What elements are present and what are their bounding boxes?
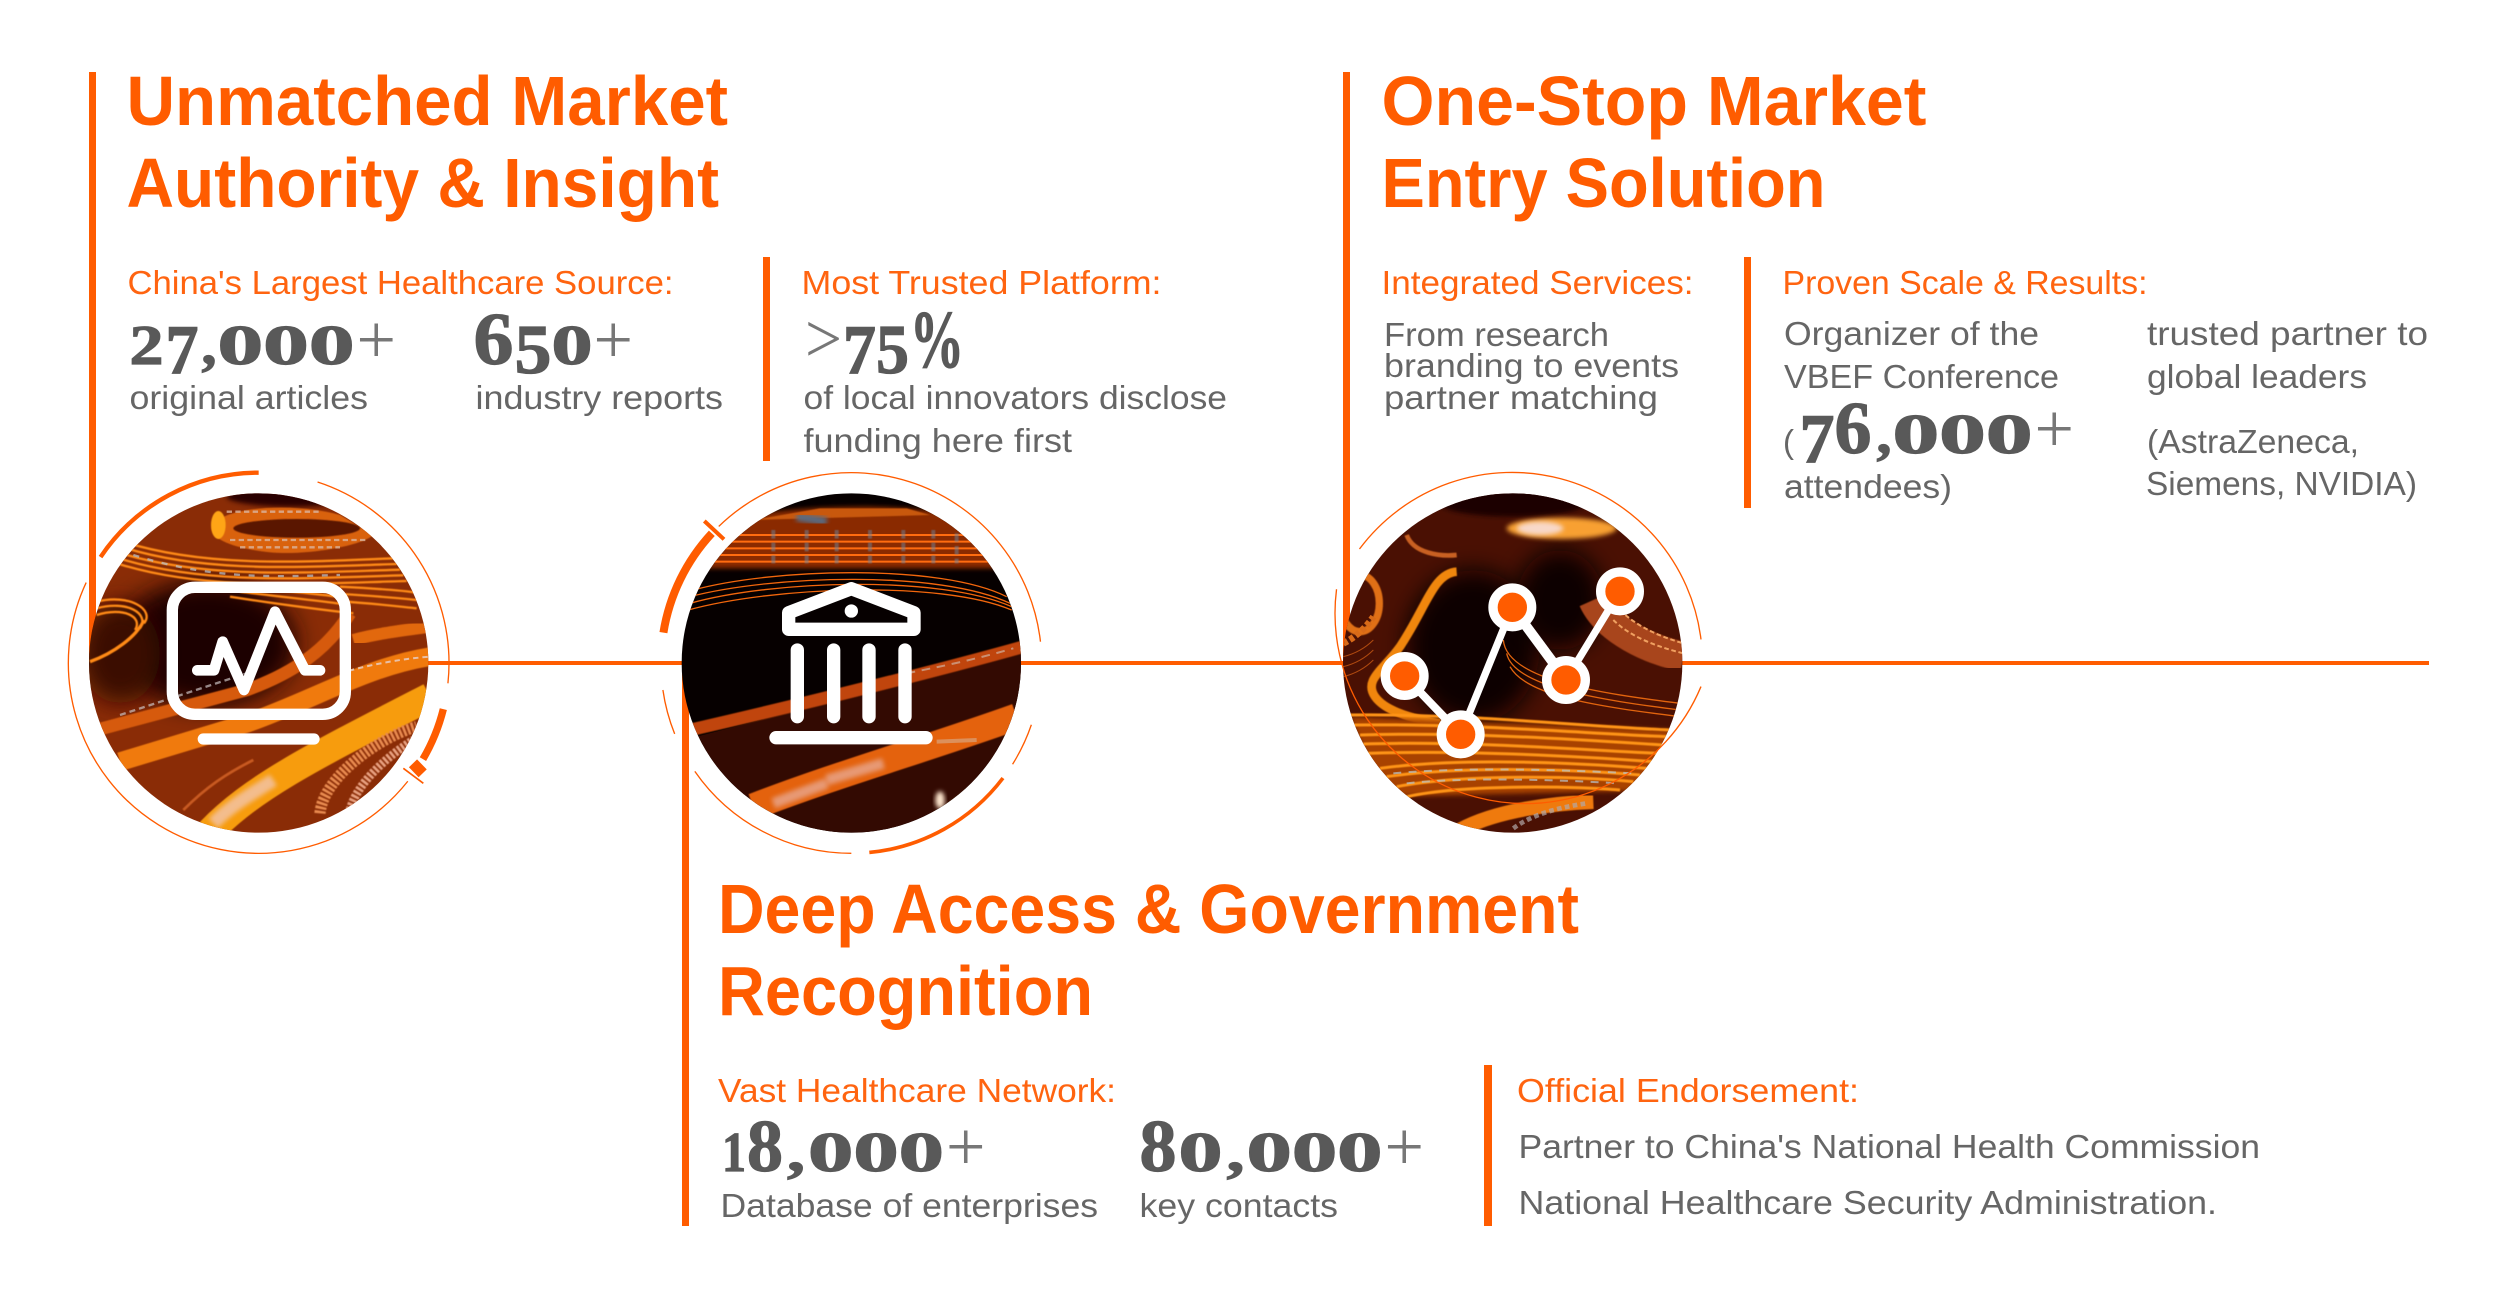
stat: 27,000+: 000 <box>218 315 354 377</box>
icon: trend line with nodes <box>1385 572 1639 754</box>
stat: 27,000+: 7 <box>166 312 198 389</box>
ring: node 3 arcs <box>1335 472 1701 804</box>
bar <box>1484 1065 1492 1226</box>
body: VBEF organizer: VBEF Conference <box>1784 358 2059 395</box>
heading: section 1: Authority & Insight <box>126 144 719 222</box>
panel: official endorsement <box>1484 1065 2260 1226</box>
connector line <box>428 661 2429 665</box>
stat: >75%: 5 <box>876 312 909 389</box>
stat: 76,000+: 6 <box>1834 388 1872 470</box>
panel: one-stop market entry <box>1382 62 1926 416</box>
label: official endorsement: Official Endorsement: <box>1517 1072 1859 1109</box>
stat: 650+: + <box>594 302 633 379</box>
photo: orange light streaks 3 <box>1340 490 1687 837</box>
stat: 650+: 6 <box>474 299 514 381</box>
body: endorsements: National Healthcare Security Administration. <box>1518 1184 2217 1221</box>
heading: section 1: Unmatched Market <box>126 62 728 140</box>
panel: unmatched market authority <box>126 62 728 416</box>
ring: node 2 arcs <box>663 473 1040 853</box>
stat: 80,000+: + <box>1384 1109 1424 1186</box>
photo: orange light streaks 1 <box>80 487 433 837</box>
stat: 80,000+: , <box>1226 1122 1244 1184</box>
stat: 27,000+: 2 <box>130 315 164 377</box>
stat: 80,000+: 000 <box>1246 1122 1382 1184</box>
heading: section 3: One-Stop Market <box>1382 62 1926 140</box>
body: integrated services: From research <box>1384 316 1609 353</box>
body: integrated services: partner matching <box>1384 379 1658 416</box>
stat: 80,000+: 0 <box>1178 1122 1222 1184</box>
body: endorsements: Partner to China's National Health Commission <box>1518 1128 2260 1165</box>
stat: 27,000+: , <box>202 315 216 377</box>
node 3: trend line <box>1335 472 1701 837</box>
ring: node 1 arcs <box>68 473 449 853</box>
stat: 76,000+: + <box>2034 391 2074 468</box>
stat: 650+: 0 <box>552 315 592 377</box>
stat: 27,000+: + <box>356 302 396 379</box>
label: vast network: Vast Healthcare Network: <box>718 1072 1116 1109</box>
stat: >75%: > <box>805 301 842 378</box>
heading: section 2: Recognition <box>718 952 1093 1030</box>
stat: 18,000+: 000 <box>808 1122 944 1184</box>
bar: section 3 <box>1343 72 1350 663</box>
heading: section 2: Deep Access & Government <box>718 870 1579 948</box>
body: VBEF organizer: ( <box>1783 423 1794 460</box>
photo: orange light streaks 2 <box>680 490 1027 837</box>
heading: section 3: Entry Solution <box>1382 144 1826 222</box>
stat: 18,000+: 8 <box>747 1106 783 1188</box>
body: VBEF organizer: Organizer of the <box>1784 315 2039 352</box>
body: trusted partner: Siemens, NVIDIA) <box>2146 465 2417 502</box>
label: integrated services: Integrated Services: <box>1382 264 1694 301</box>
caption: database: Database of enterprises <box>720 1187 1098 1224</box>
body: trusted partner: trusted partner to <box>2147 315 2428 352</box>
node 2: institution <box>663 473 1040 853</box>
stat: 18,000+: , <box>787 1122 805 1184</box>
bar: section 2 <box>682 663 689 1226</box>
bar <box>763 257 770 461</box>
stat: 76,000+: , <box>1876 404 1892 466</box>
body: VBEF organizer: attendees) <box>1784 468 1952 505</box>
bar <box>1744 257 1751 508</box>
label: proven scale: Proven Scale & Results: <box>1782 264 2148 301</box>
caption: key contacts: key contacts <box>1140 1187 1338 1224</box>
label: most trusted: Most Trusted Platform: <box>802 264 1162 301</box>
caption: funding disclosure: funding here first <box>804 422 1072 459</box>
stat: >75%: % <box>910 294 964 385</box>
stat: 650+: 5 <box>514 312 552 389</box>
label: largest source: China's Largest Healthcare Source: <box>128 264 674 301</box>
stat: 18,000+: 1 <box>722 1122 746 1184</box>
body: trusted partner: global leaders <box>2147 358 2367 395</box>
caption: industry reports: industry reports <box>476 379 723 416</box>
node 1: monitor <box>68 473 449 853</box>
panel: most trusted platform <box>763 257 1227 461</box>
caption: funding disclosure: of local innovators disclose <box>804 379 1227 416</box>
icon: monitor with pulse <box>172 587 345 739</box>
body: integrated services: branding to events <box>1384 347 1679 384</box>
stat: >75%: 7 <box>843 312 876 389</box>
icon: institution building <box>776 589 926 738</box>
stat: 76,000+: 000 <box>1892 404 2032 466</box>
stat: 80,000+: 8 <box>1140 1106 1176 1188</box>
panel: proven scale and results <box>1744 257 2428 508</box>
stat: 18,000+: + <box>946 1109 985 1186</box>
bar: section 1 <box>89 72 96 663</box>
panel: deep access and government recognition <box>718 870 1579 1224</box>
caption: original articles: original articles <box>130 379 368 416</box>
body: trusted partner: (AstraZeneca, <box>2147 423 2359 460</box>
stat: 76,000+: 7 <box>1800 401 1834 478</box>
